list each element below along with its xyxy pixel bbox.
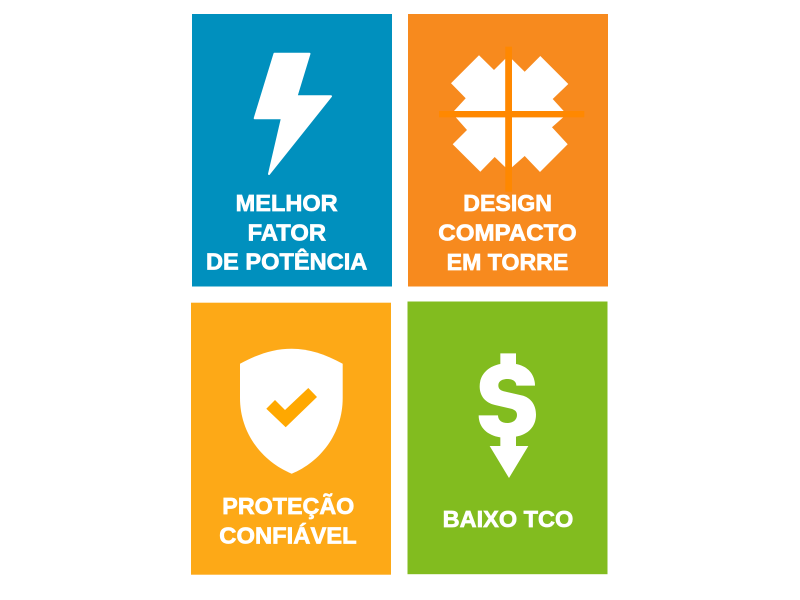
- icon: dollar with down arrow: [479, 353, 536, 478]
- heading: design compacto em torre: EM TORRE: [447, 249, 568, 275]
- icon: four-part tower module: [439, 47, 584, 192]
- heading: design compacto em torre: DESIGN: [463, 190, 552, 216]
- panel: melhor fator de potencia: [192, 14, 392, 286]
- heading: design compacto em torre: [438, 190, 577, 275]
- panel: baixo tco: [408, 302, 608, 574]
- panel: design compacto em torre: [408, 14, 608, 286]
- icon: lightning bolt: [255, 54, 331, 174]
- heading: melhor fator de potencia: FATOR: [248, 219, 326, 245]
- heading: baixo tco: BAIXO TCO: [443, 506, 573, 532]
- heading: protecao confiavel: PROTEÇÃO: [222, 492, 354, 519]
- heading: design compacto em torre: COMPACTO: [438, 219, 577, 245]
- heading: melhor fator de potencia: MELHOR: [236, 190, 338, 216]
- heading: melhor fator de potencia: DE POTÊNCIA: [206, 248, 367, 275]
- heading: melhor fator de potencia: [206, 190, 367, 275]
- heading: protecao confiavel: CONFIÁVEL: [219, 522, 357, 549]
- heading: protecao confiavel: [219, 492, 357, 549]
- icon: shield with check: [240, 349, 343, 474]
- panel: protecao confiavel: [191, 303, 391, 575]
